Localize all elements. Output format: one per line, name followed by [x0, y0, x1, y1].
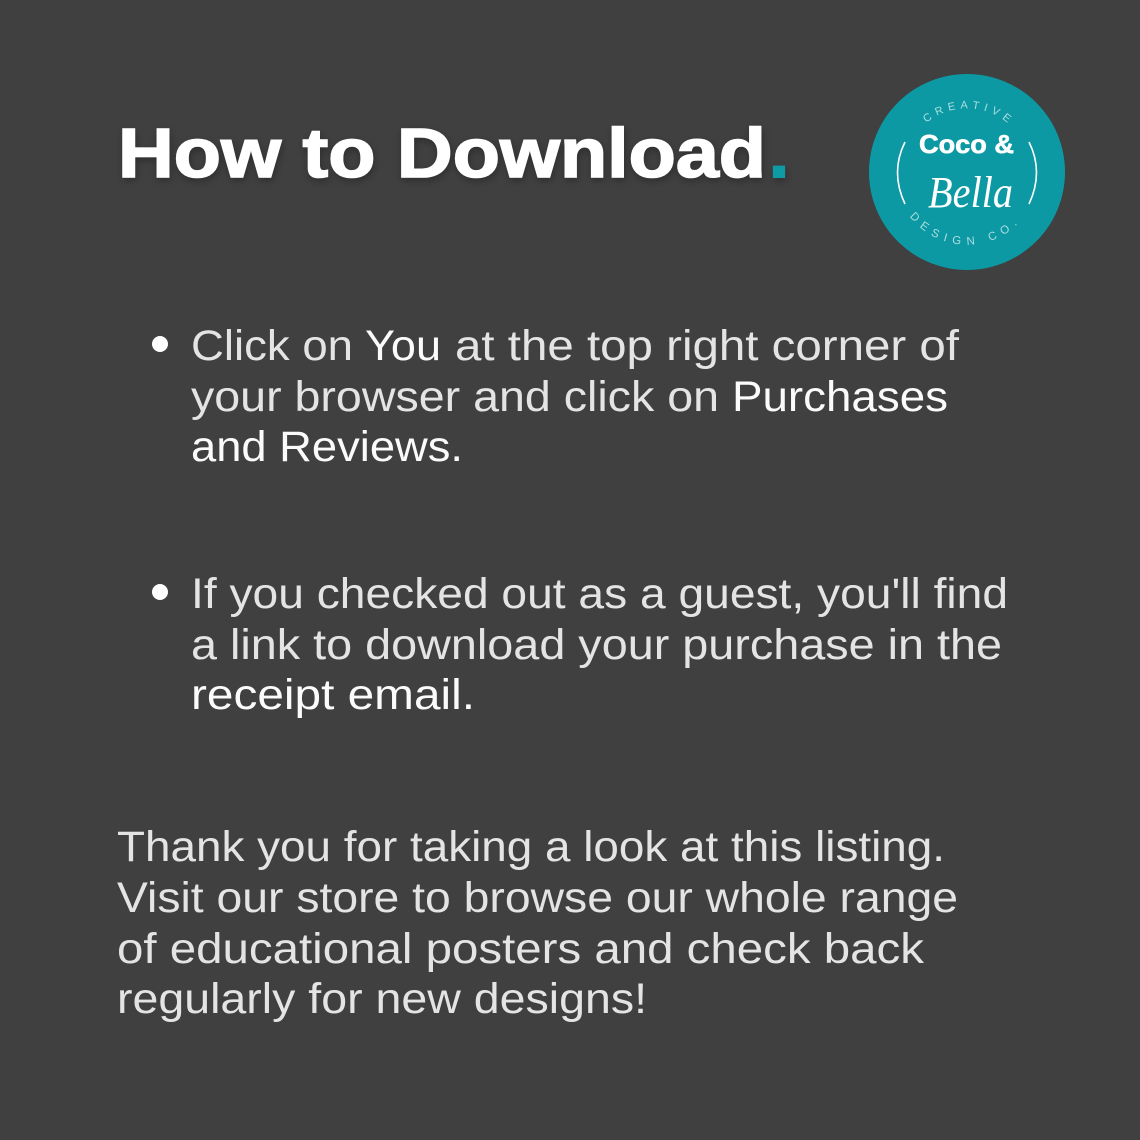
title: .: [769, 114, 789, 192]
bullet 2: receipt email.: [191, 671, 475, 719]
logo badge: DESIGN CO.: [910, 212, 1017, 245]
closing message: of educational posters and check back: [117, 925, 925, 973]
bullet 2: [152, 570, 1008, 719]
closing message: Visit our store to browse our whole range: [117, 874, 958, 922]
bullet 1: Click on: [191, 322, 353, 370]
bullet 1: Purchases: [732, 373, 948, 421]
bullet 1: [152, 322, 960, 471]
closing message: regularly for new designs!: [117, 975, 647, 1023]
title: How to Download: [118, 114, 766, 192]
logo badge: [869, 74, 1065, 270]
bullet 2: If you checked out as a guest, you'll find: [191, 570, 1008, 618]
bullet 1: your browser and click on: [191, 373, 719, 421]
logo badge: CREATIVE: [924, 100, 1012, 123]
bullet 1: at the top right corner of: [455, 322, 960, 370]
bullet 1: and Reviews.: [191, 423, 463, 471]
logo badge: Bella: [928, 168, 1013, 217]
bullet 1: You: [365, 322, 441, 370]
closing message: [117, 823, 958, 1023]
bullet 2: a link to download your purchase in the: [191, 621, 1002, 669]
closing message: Thank you for taking a look at this listing.: [117, 823, 945, 871]
logo badge: Coco &: [919, 129, 1014, 159]
